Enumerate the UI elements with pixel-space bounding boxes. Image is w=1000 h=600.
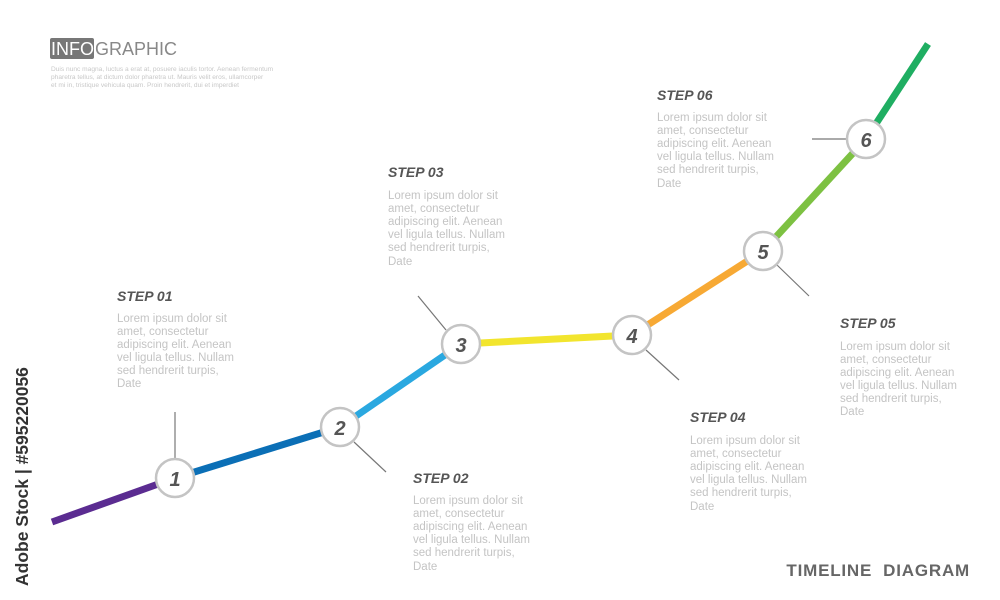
leader lines: [175, 139, 846, 472]
step 02 text: adipiscing elit. Aenean: [413, 521, 527, 533]
step 03 text: amet, consectetur: [388, 203, 480, 215]
step 04 text: Lorem ipsum dolor sit: [690, 435, 801, 447]
step numbers: 4: [625, 326, 638, 348]
step 04 text: STEP 04: [690, 409, 746, 425]
step 05 text: [840, 315, 957, 418]
header: infographic title: et mi in, tristique vehicula quam. Proin hendrerit, dui et imperdiet: [51, 82, 239, 89]
step 02 text: [413, 470, 530, 573]
step 03 text: sed hendrerit turpis,: [388, 242, 490, 254]
step 04 text: [690, 409, 807, 513]
timeline path: [52, 44, 928, 522]
step numbers: [169, 130, 872, 491]
step 05 text: adipiscing elit. Aenean: [840, 367, 954, 379]
step 05 text: sed hendrerit turpis,: [840, 393, 942, 405]
step 06 text: STEP 06: [657, 87, 713, 103]
step 04 text: adipiscing elit. Aenean: [690, 461, 804, 473]
step 05 text: STEP 05: [840, 315, 896, 331]
step 05 text: Date: [840, 406, 864, 418]
header: infographic title: [50, 38, 274, 89]
step 03 text: Lorem ipsum dolor sit: [388, 190, 499, 202]
step numbers: 6: [860, 130, 872, 152]
header: infographic title: GRAPHIC: [95, 39, 177, 59]
step 06 text: vel ligula tellus. Nullam: [657, 151, 774, 163]
step 04 text: sed hendrerit turpis,: [690, 487, 792, 499]
step 06 text: amet, consectetur: [657, 125, 749, 137]
step numbers: 1: [169, 469, 181, 491]
step 01 text: [117, 288, 234, 390]
step 01 text: adipiscing elit. Aenean: [117, 339, 231, 351]
step 06 text: sed hendrerit turpis,: [657, 164, 759, 176]
footer title: TIMELINE DIAGRAM: [786, 561, 970, 580]
step 02 text: STEP 02: [413, 470, 469, 486]
step markers: [156, 120, 885, 497]
step 01 text: STEP 01: [117, 288, 173, 304]
step 04 text: vel ligula tellus. Nullam: [690, 474, 807, 486]
step 05 text: amet, consectetur: [840, 354, 932, 366]
step 05 text: vel ligula tellus. Nullam: [840, 380, 957, 392]
step 06 text: [657, 87, 774, 190]
step 06 text: adipiscing elit. Aenean: [657, 138, 771, 150]
step 02 text: Lorem ipsum dolor sit: [413, 495, 524, 507]
step numbers: 3: [455, 335, 467, 357]
header: infographic title: pharetra tellus, at dictum dolor pharetra ut. Mauris velit eros, ullamcorper: [51, 74, 264, 81]
step 01 text: Date: [117, 378, 141, 390]
step 03 text: adipiscing elit. Aenean: [388, 216, 502, 228]
step 01 text: vel ligula tellus. Nullam: [117, 352, 234, 364]
step 05 text: Lorem ipsum dolor sit: [840, 341, 951, 353]
step numbers: 5: [757, 242, 769, 264]
step 03 text: vel ligula tellus. Nullam: [388, 229, 505, 241]
side label: stock id: Adobe Stock | #595220056: [12, 367, 32, 586]
step 02 text: vel ligula tellus. Nullam: [413, 534, 530, 546]
step 02 text: Date: [413, 561, 437, 573]
header: infographic title: Duis nunc magna, luctus a erat at, posuere iaculis tortor. Aenean fermentum: [51, 66, 274, 73]
header: infographic title: INFO: [51, 39, 94, 59]
step 03 text: Date: [388, 256, 412, 268]
step 04 text: amet, consectetur: [690, 448, 782, 460]
step 04 text: Date: [690, 501, 714, 513]
step 01 text: amet, consectetur: [117, 326, 209, 338]
step 02 text: amet, consectetur: [413, 508, 505, 520]
step numbers: 2: [333, 418, 346, 440]
step 03 text: [388, 164, 505, 268]
step 06 text: Date: [657, 178, 681, 190]
step 03 text: STEP 03: [388, 164, 444, 180]
step 02 text: sed hendrerit turpis,: [413, 547, 515, 559]
step 01 text: Lorem ipsum dolor sit: [117, 313, 228, 325]
step 01 text: sed hendrerit turpis,: [117, 365, 219, 377]
step 06 text: Lorem ipsum dolor sit: [657, 112, 768, 124]
